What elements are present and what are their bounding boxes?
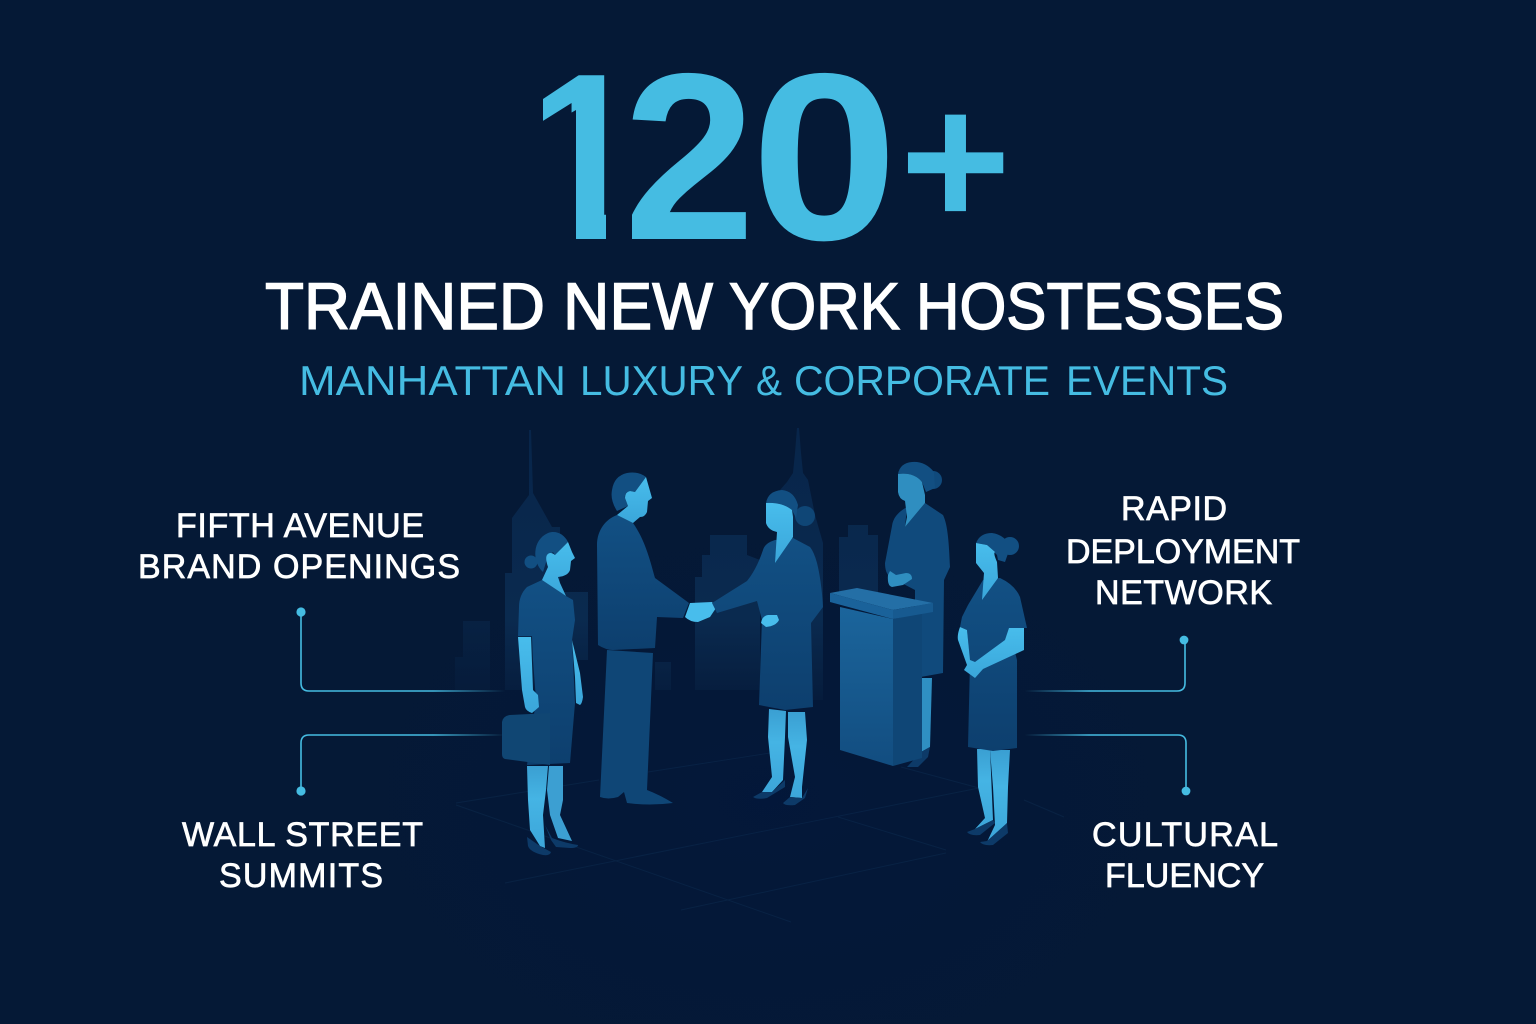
label: Fifth Avenue Brand Openings (138, 507, 460, 586)
infographic canvas (140, 72, 1300, 922)
subheading: CORPORATE (794, 357, 1050, 404)
connector: Rapid Deployment (1025, 636, 1188, 691)
label: Rapid Deployment Network: NETWORK (1095, 574, 1272, 612)
label: Wall Street Summits: SUMMITS (219, 857, 383, 895)
subheading: EVENTS (1066, 357, 1228, 404)
heading: NEW (563, 269, 714, 343)
subheading: & (756, 357, 782, 404)
label: Rapid Deployment Network: DEPLOYMENT (1066, 533, 1300, 571)
heading: YORK (729, 269, 900, 343)
heading: TRAINED (265, 269, 545, 343)
podium (830, 588, 933, 766)
figure: back hostess behind podium (885, 462, 950, 767)
label: Cultural Fluency: CULTURAL (1092, 816, 1278, 854)
label: Fifth Avenue Brand Openings: FIFTH AVENUE (176, 507, 424, 545)
skyline silhouette (455, 428, 878, 700)
figure: man in suit shaking hands (597, 472, 716, 804)
big number: 120+: 12 (516, 25, 755, 290)
heading: HOSTESSES (916, 269, 1284, 343)
label: Wall Street Summits: WALL STREET (182, 816, 423, 854)
heading (265, 269, 1284, 343)
label: Wall Street Summits (182, 816, 423, 895)
big number: 120+: 0 (751, 25, 898, 290)
figure: left hostess with briefcase (502, 532, 583, 855)
connector: Cultural Fluency (1025, 735, 1190, 795)
figure: right hostess with clasped hands (958, 533, 1027, 845)
floor grid lines (456, 753, 1064, 922)
connector: Wall Street (296, 735, 505, 796)
subheading: LUXURY (580, 357, 743, 404)
big number: 120+: + (900, 55, 1011, 267)
subheading (299, 357, 1228, 404)
subheading: MANHATTAN (299, 357, 566, 404)
connector: Fifth Avenue (296, 607, 505, 691)
label: Rapid Deployment Network (1066, 490, 1300, 612)
figure: center hostess shaking hands (712, 490, 823, 805)
label: Rapid Deployment Network: RAPID (1121, 490, 1227, 528)
label: Cultural Fluency (1092, 816, 1278, 895)
label: Fifth Avenue Brand Openings: BRAND OPENINGS (138, 548, 460, 586)
label: Cultural Fluency: FLUENCY (1105, 857, 1264, 895)
